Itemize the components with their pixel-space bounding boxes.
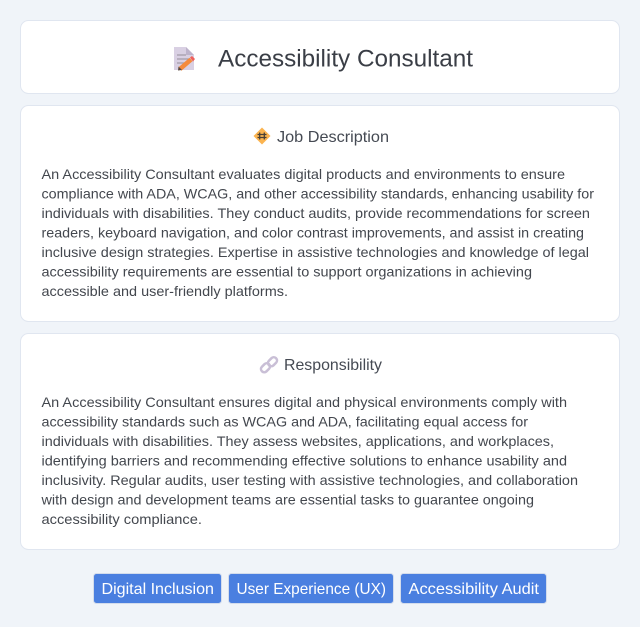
tag: user experience: User Experience (UX) [236, 581, 386, 598]
body text: job description: readers, keyboard navigation, and color contrast improvements, and assist in creating [42, 224, 584, 240]
icon: chain link [260, 356, 278, 374]
icon: document with pencil [174, 47, 195, 70]
body text: job description [42, 166, 594, 299]
panel: responsibility [20, 334, 620, 550]
tag: digital inclusion: Digital Inclusion [102, 581, 214, 598]
body text: responsibility: with design and development teams are essential tasks to guarantee ongoing [40, 492, 534, 508]
heading: job description: Job Description [277, 129, 389, 146]
tag: accessibility audit [400, 574, 546, 604]
tag: accessibility audit: Accessibility Audit [408, 581, 540, 598]
icon: orange diamond sign [254, 128, 270, 144]
tag: digital inclusion [94, 574, 222, 604]
body text: job description: accessibility requirements are essential to support organizations in achieving [42, 264, 532, 280]
body text: responsibility [40, 394, 578, 527]
body text: responsibility: An Accessibility Consultant ensures digital and physical environments comply with [42, 394, 567, 410]
panel: job description [20, 106, 620, 322]
title text: Accessibility Consultant [218, 46, 473, 72]
tag: user experience [228, 574, 394, 604]
body text: job description: inclusive design strategies. Expertise in assistive technologies and knowledge of legal [42, 244, 589, 260]
body text: responsibility: inclusivity. Regular audits, user testing with assistive technologies, and collaboration [42, 472, 578, 488]
tags row [94, 574, 546, 604]
body text: responsibility: accessibility standards such as WCAG and ADA, facilitating equal access for [42, 414, 528, 430]
body text: responsibility: accessibility compliance. [42, 511, 202, 527]
panel: title [20, 20, 620, 94]
body text: job description: accessible and user-friendly platforms. [42, 283, 288, 299]
heading: responsibility: Responsibility [284, 357, 382, 374]
body text: job description: individuals with disabilities. They conduct audits, provide recommendations for screen [42, 205, 590, 221]
body text: job description: compliance with ADA, WCAG, and other accessibility standards, enhancing usability for [42, 186, 594, 202]
body text: responsibility: individuals with disabilities. They assess websites, applications, and workplaces, [42, 433, 554, 449]
body text: responsibility: identifying barriers and recommending effective solutions to enhance usability and [42, 452, 567, 468]
body text: job description: An Accessibility Consultant evaluates digital products and environments to ensure [42, 166, 565, 182]
